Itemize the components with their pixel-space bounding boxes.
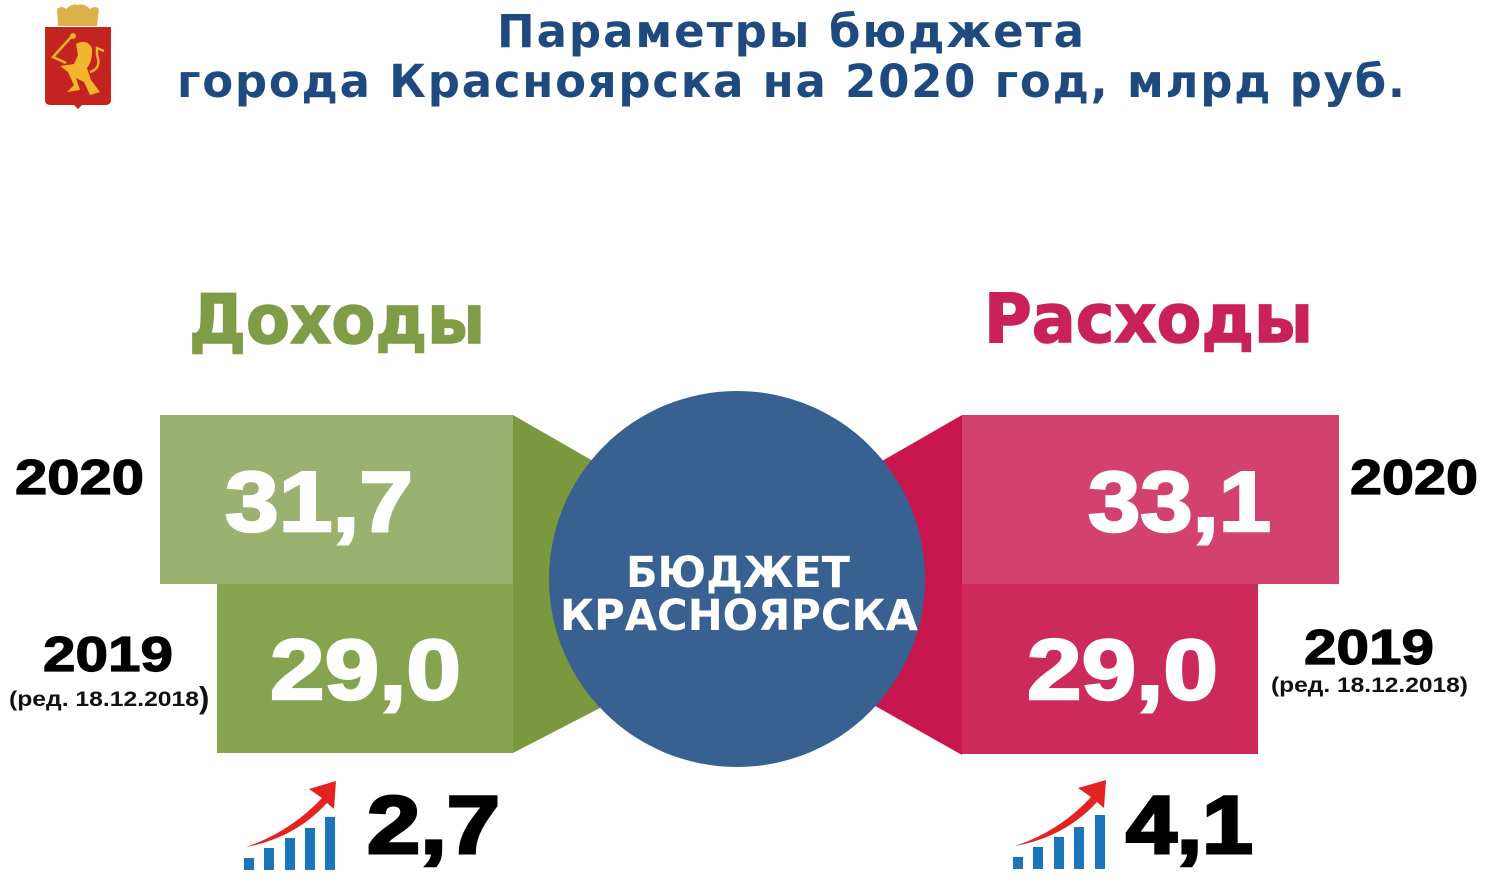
icon: growth chart expenses xyxy=(1013,780,1106,869)
label: expenses 2019: 2019 xyxy=(1304,621,1434,675)
label: income 2019: (ред. 18.12.2018 xyxy=(9,688,199,711)
icon: growth chart income xyxy=(244,781,336,870)
label: expenses 2019 xyxy=(1271,621,1468,697)
panel: expenses 2019: 29,0 xyxy=(1027,623,1218,718)
label: income 2020: 2020 xyxy=(15,451,144,505)
panel: income 2019 xyxy=(217,584,513,753)
central budget circle: КРАСНОЯРСКА xyxy=(560,591,919,641)
label: income 2019 xyxy=(9,628,209,715)
panel: income 2020 xyxy=(160,415,513,584)
title: города Красноярска на 2020 год, млрд руб. xyxy=(177,55,1405,108)
label: expenses 2019: (ред. 18.12.2018) xyxy=(1271,674,1468,697)
expense side wedge xyxy=(870,415,962,755)
panel: income 2020: 31,7 xyxy=(225,455,413,550)
panel: expenses 2019 xyxy=(962,584,1258,754)
central budget circle: БЮДЖЕТ xyxy=(626,548,851,598)
heading: expenses: Расходы xyxy=(984,280,1313,359)
label: expenses 2020: 2020 xyxy=(1350,451,1478,505)
label: income 2019: ) xyxy=(199,680,209,715)
panel: income 2019: 29,0 xyxy=(270,623,461,718)
increase value expenses: 4,1 xyxy=(1126,780,1253,871)
increase value income: 2,7 xyxy=(367,780,500,871)
title xyxy=(177,5,1405,108)
panel: expenses 2020 xyxy=(962,415,1339,584)
title: Параметры бюджета xyxy=(497,5,1084,58)
label: income 2019: 2019 xyxy=(43,628,173,682)
panel: expenses 2020: 33,1 xyxy=(1088,455,1271,550)
central budget circle xyxy=(549,391,925,767)
icon: Krasnoyarsk coat of arms xyxy=(45,4,111,109)
income side wedge xyxy=(513,415,600,753)
heading: income: Доходы xyxy=(189,281,485,360)
